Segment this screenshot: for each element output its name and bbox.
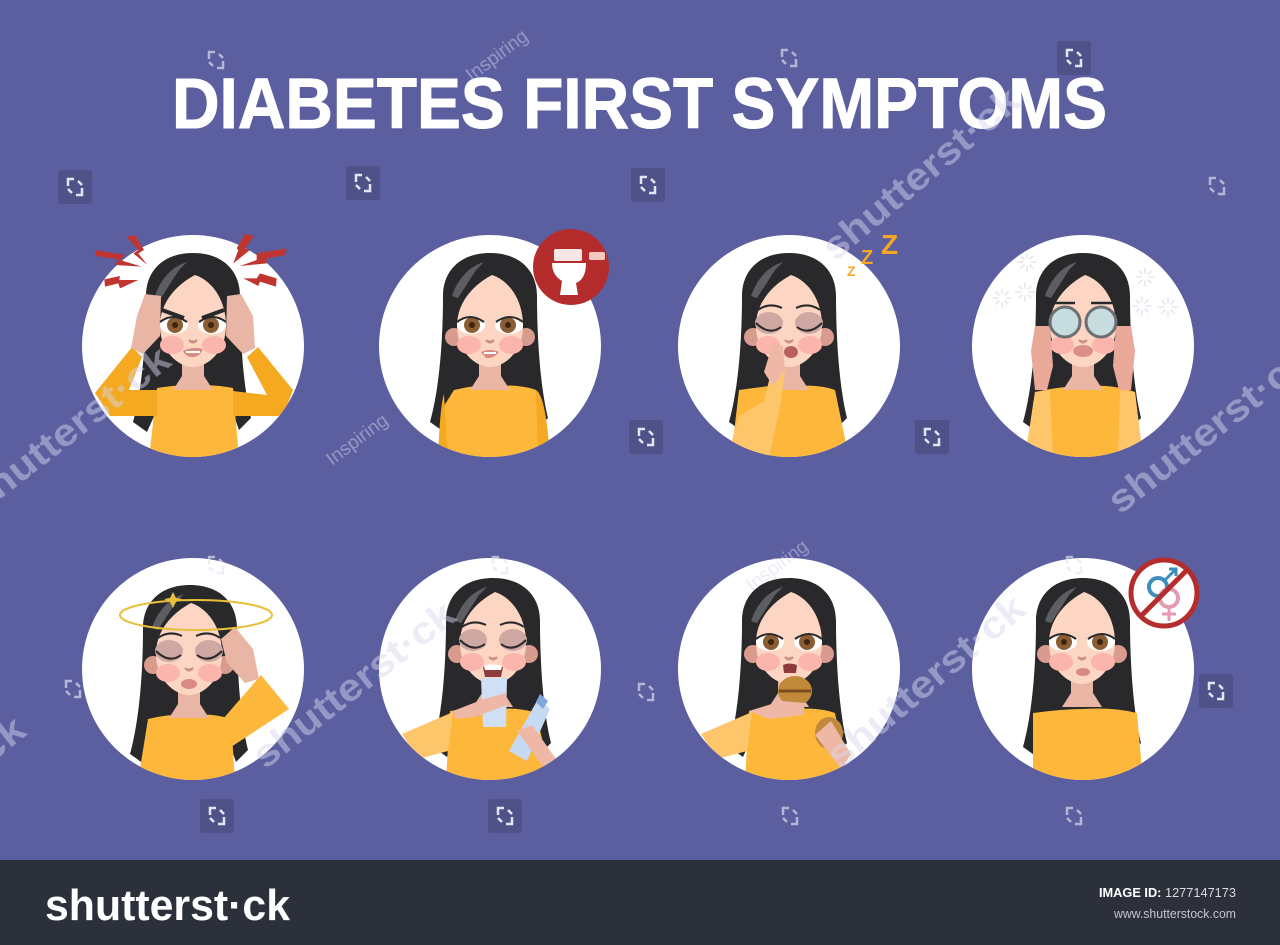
watermark: shutterstock and Inspiring text: Inspiring — [322, 410, 392, 470]
panel circle — [972, 235, 1194, 457]
watermark: shutterstock and Inspiring text: Inspiring — [742, 536, 812, 596]
figure: woman holding head — [95, 253, 293, 458]
icon: sleeping Z letters: Z — [881, 229, 898, 260]
website: www.shutterstock.com — [1113, 906, 1236, 921]
watermark: shutterstock and Inspiring text: shutterst·ck — [245, 593, 464, 777]
panel circle — [678, 235, 900, 457]
panel circle — [678, 558, 900, 780]
figure: woman eating burger — [701, 578, 851, 781]
panel: increased hunger — [678, 558, 900, 781]
figure: woman drinking water — [402, 578, 556, 781]
figure: woman yawning — [727, 253, 849, 458]
panel: excessive thirst — [379, 558, 601, 781]
panel: frequent urination — [379, 229, 609, 458]
figure: woman worried — [430, 253, 550, 458]
icon: sleeping Z letters — [847, 229, 898, 279]
panel circle — [82, 235, 304, 457]
icon: red lightning bolts — [95, 234, 287, 288]
icon: sleeping Z letters: Z — [861, 247, 873, 269]
panel circle — [379, 558, 601, 780]
panel: blurred vision — [972, 235, 1194, 458]
figure: woman sad — [1023, 578, 1143, 781]
icon: no gender symbol — [1131, 560, 1197, 626]
figure: woman with glasses — [1023, 253, 1143, 458]
figure: woman dizzy — [130, 585, 289, 781]
title: DIABETES FIRST SYMPTOMS — [172, 65, 1107, 144]
footer logo: shutterst·ck — [45, 881, 291, 930]
image id: IMAGE ID: 1277147173 — [1099, 885, 1236, 900]
icon: toilet badge — [533, 229, 609, 305]
icon: dizzy halo with stars — [120, 592, 272, 630]
panel circle — [82, 558, 304, 780]
panel circle — [379, 235, 601, 457]
panel: fatigue — [678, 229, 900, 458]
watermark: logo squares — [58, 41, 1233, 833]
watermark: shutterstock and Inspiring text: Inspiring — [462, 26, 532, 86]
panel circle — [972, 558, 1194, 780]
watermark: shutterstock and Inspiring text: shutterst·ck — [814, 79, 1029, 269]
icon: blur sparkles — [993, 253, 1177, 316]
panel: sexual dysfunction — [972, 558, 1197, 781]
panel: headache — [82, 234, 304, 458]
watermark: shutterstock and Inspiring text: shutterst·ck — [819, 587, 1034, 777]
panel: dizziness — [82, 558, 304, 781]
icon: sleeping Z letters: Z — [847, 263, 856, 279]
footer bar — [0, 860, 1280, 945]
